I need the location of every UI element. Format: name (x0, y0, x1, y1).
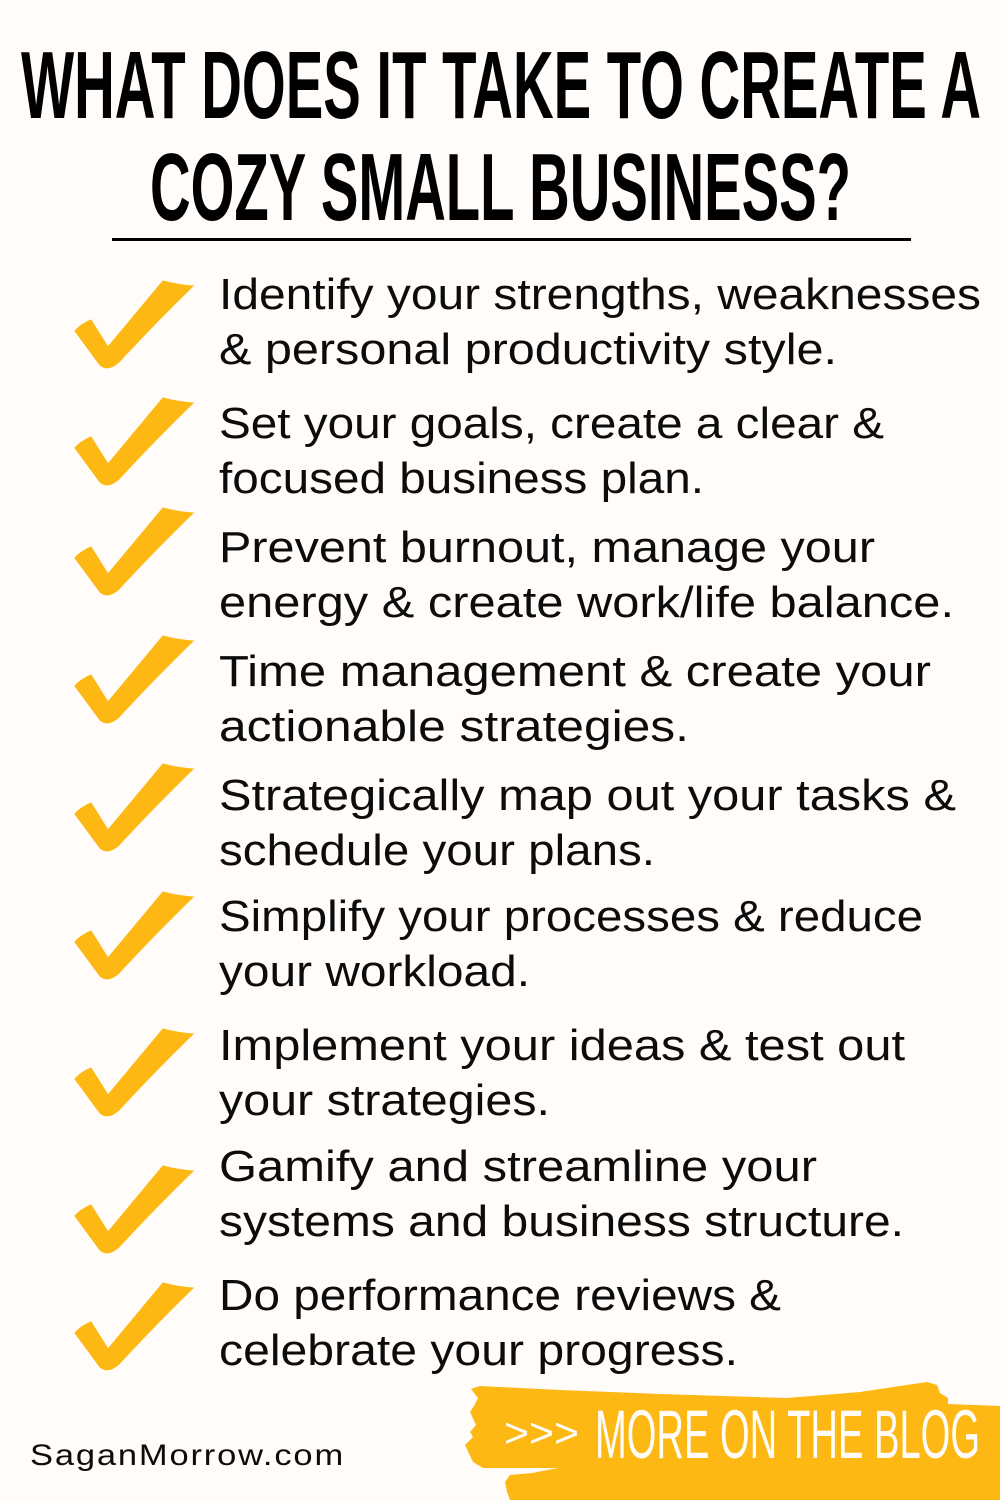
icon: check mark 5 (75, 764, 193, 851)
icon: check mark 8 (75, 1166, 193, 1253)
checklist item 4 (75, 636, 931, 751)
checklist item 7 (75, 1021, 905, 1125)
text: implement: your strategies. (219, 1076, 550, 1125)
text: time management (219, 647, 931, 751)
icon: check mark 6 (75, 892, 193, 979)
arrows: >>> (504, 1409, 579, 1456)
text: goals: Set your goals, create a clear & (219, 399, 884, 448)
checklist item 3 (75, 508, 954, 627)
text: gamify: systems and business structure. (219, 1197, 904, 1246)
text: burnout: Prevent burnout, manage your (219, 523, 875, 572)
checklist item 5 (75, 764, 956, 875)
title (21, 32, 981, 241)
text: gamify: Gamify and streamline your (219, 1142, 817, 1191)
text: time management: actionable strategies. (219, 702, 689, 751)
text: implement: Implement your ideas & test out (219, 1021, 905, 1070)
icon: check mark 2 (75, 398, 193, 485)
checklist item 8 (75, 1142, 904, 1253)
icon: check mark 1 (75, 281, 193, 368)
text: strengths (219, 270, 981, 374)
text: goals: focused business plan. (219, 454, 704, 503)
text: strengths: Identify your strengths, weaknesses (219, 270, 981, 319)
icon: check mark 7 (75, 1029, 193, 1116)
checklist item 6 (75, 892, 923, 996)
text: burnout (219, 523, 954, 627)
icon: check mark 9 (75, 1283, 193, 1370)
text: simplify (219, 892, 923, 996)
text: map tasks: Strategically map out your tasks & (219, 771, 956, 820)
text: reviews (219, 1271, 781, 1375)
website url: SaganMorrow.com (30, 1439, 345, 1472)
text: implement (219, 1021, 905, 1125)
text: gamify (219, 1142, 904, 1246)
text: strengths: & personal productivity style. (219, 325, 837, 374)
checklist item 9 (75, 1271, 781, 1375)
checklist item 1 (75, 270, 981, 374)
text: simplify: your workload. (219, 947, 530, 996)
icon: check mark 4 (75, 636, 193, 723)
text: map tasks: schedule your plans. (219, 826, 655, 875)
checklist item 2 (75, 398, 884, 503)
icon: check mark 3 (75, 508, 193, 595)
text: simplify: Simplify your processes & reduce (219, 892, 923, 941)
brush stroke background (465, 1382, 1000, 1500)
text: burnout: energy & create work/life balance. (219, 578, 954, 627)
text: time management: Time management & create your (219, 647, 931, 696)
text: map tasks (219, 771, 956, 875)
text: reviews: celebrate your progress. (219, 1326, 738, 1375)
text: reviews: Do performance reviews & (219, 1271, 781, 1320)
text: goals (219, 399, 884, 503)
call to action banner (465, 1382, 1000, 1500)
